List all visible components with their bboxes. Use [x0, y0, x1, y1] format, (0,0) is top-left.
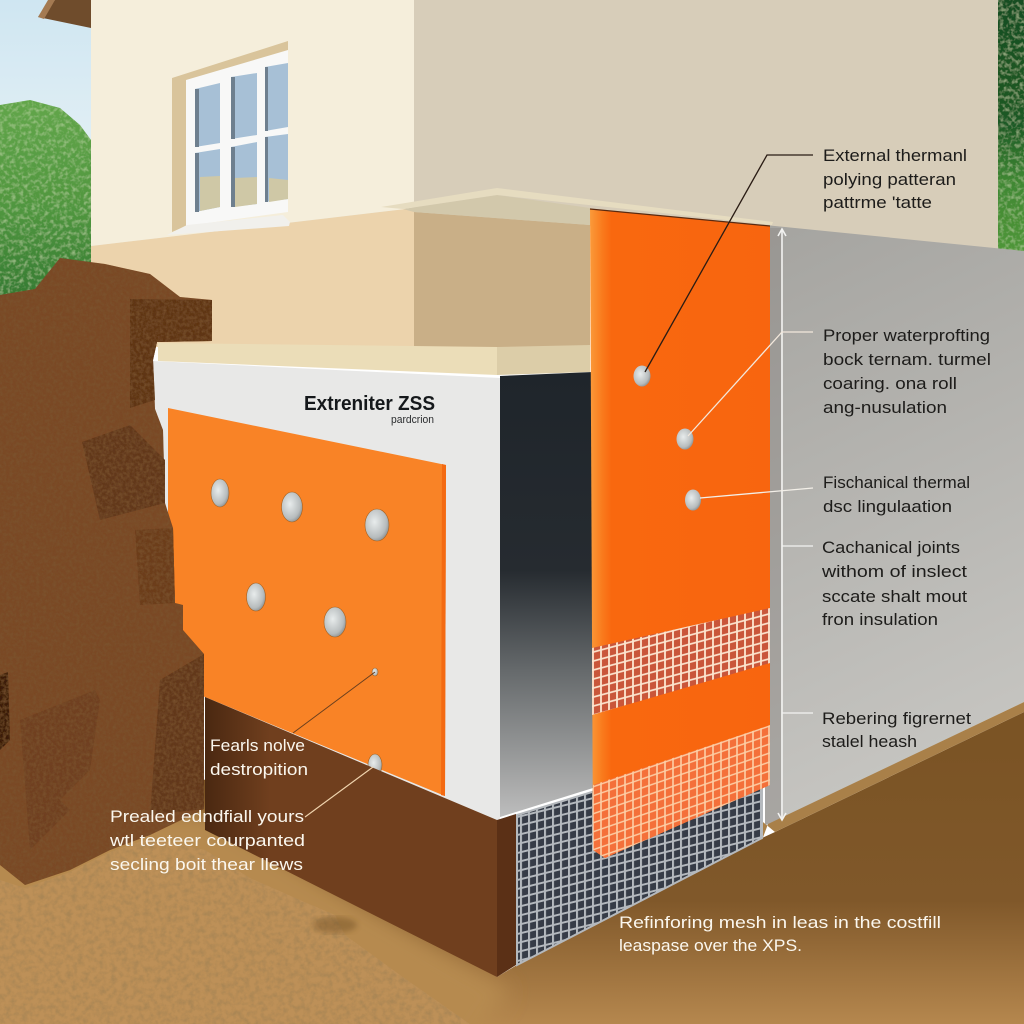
title label: Extreniter ZSS: [304, 393, 435, 415]
window sill: [167, 215, 290, 235]
grey reinforcing mesh: [517, 740, 762, 965]
top shadow line: [590, 209, 770, 226]
callout: mechanical joints: Cachanical joints: [822, 538, 960, 557]
callout: mechanical thermal: [823, 473, 970, 516]
window panes: [195, 63, 288, 212]
mesh band lower: [593, 725, 770, 858]
brown footing: [205, 697, 516, 977]
panel: left orange XPS board: [168, 408, 446, 796]
callout: sealing note: secling boit thear llews: [110, 855, 303, 874]
sand shadow: [313, 917, 357, 933]
callout: waterproofing: Proper waterprofting: [823, 326, 990, 345]
ground: [0, 650, 1024, 1024]
callout: waterproofing: bock ternam. turmel: [823, 350, 991, 369]
soil mound: [0, 258, 212, 885]
window frame: [186, 50, 288, 226]
callout: waterproofing: [823, 326, 991, 417]
callout: mechanical joints: fron insulation: [822, 610, 938, 629]
callout: mechanical joints: withom of inslect: [821, 562, 967, 581]
callout: fastener description: Fearls nolve: [210, 736, 305, 755]
bolts on left board: [211, 479, 389, 776]
lit ground near footing: [0, 810, 510, 1024]
dark side face: [500, 372, 593, 817]
callout: rebar mesh: [822, 709, 971, 751]
upper house wall: [91, 0, 414, 246]
callout: mechanical thermal: Fischanical thermal: [823, 473, 970, 492]
window recess: [172, 41, 288, 232]
callout: rebar mesh: stalel heash: [822, 732, 917, 751]
foundation cap: [158, 343, 590, 375]
pane shadow strips: [195, 67, 268, 212]
sand pile: [0, 838, 470, 1024]
tree at left: [0, 100, 91, 300]
mesh band upper: [592, 608, 770, 715]
panel: right orange XPS board: [590, 209, 770, 858]
recessed lower wall: [414, 212, 590, 347]
callout: sealing note: [109, 807, 305, 874]
callout: external thermal: External thermanl: [823, 146, 967, 165]
callout: external thermal: pattrme 'tatte: [823, 193, 932, 212]
title label: pardcrion: [391, 414, 434, 426]
callout: fastener description: [210, 736, 308, 779]
sky background: [0, 0, 1024, 300]
callout: reinforcing mesh: Refinforing mesh in leas in the costfill: [619, 913, 941, 932]
callout: fastener description: destropition: [210, 760, 308, 779]
callout: mechanical joints: sccate shalt mout: [822, 587, 967, 606]
callout: external thermal: [823, 146, 967, 212]
callout: reinforcing mesh: leaspase over the XPS.: [619, 936, 802, 955]
callout: sealing note: Prealed edndfiall yours: [110, 807, 304, 826]
callout: waterproofing: coaring. ona roll: [823, 374, 957, 393]
right house wall: [414, 0, 998, 250]
callout: mechanical thermal: dsc lingulaation: [823, 497, 952, 516]
dimension line with arrows: [778, 229, 786, 820]
base strip: [758, 702, 1024, 840]
white insulation board: [153, 361, 500, 822]
callout: reinforcing mesh: [619, 913, 941, 955]
ledge: [381, 188, 773, 225]
leader lines: [293, 155, 813, 817]
callout: waterproofing: ang-nusulation: [823, 398, 947, 417]
roof eave: [38, 0, 91, 28]
bolts on right board: [634, 366, 701, 510]
window: [167, 41, 290, 235]
callout: mechanical joints: [821, 538, 967, 629]
trees at right: [998, 0, 1024, 255]
dark block faces: [130, 299, 212, 408]
reflection in panes: [200, 176, 288, 211]
callout: rebar mesh: Rebering figrernet: [822, 709, 971, 728]
ledge lip: [381, 188, 773, 225]
title label: [304, 393, 435, 426]
ledge underside: [403, 195, 590, 225]
right grey wall: [758, 225, 1024, 840]
callout: sealing note: wtl teeteer courpanted: [109, 831, 305, 850]
callout: external thermal: polying patteran: [823, 170, 956, 189]
lower plinth wall: [91, 208, 414, 347]
